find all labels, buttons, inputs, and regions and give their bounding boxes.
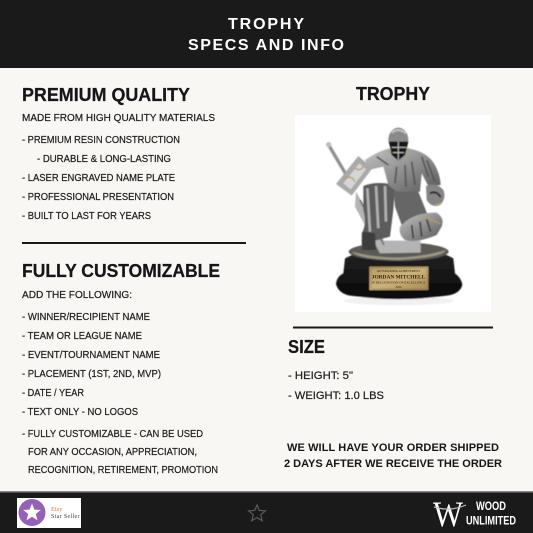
list: quality features: - PREMIUM RESIN CONSTRUCTION: [22, 135, 180, 146]
text: occasions note: - FULLY CUSTOMIZABLE - CAN BE USED: [22, 429, 203, 440]
logo: Wood Unlimited: WOOD: [476, 501, 506, 513]
plate text: OUTSTANDING ACHIEVEMENT: [377, 269, 420, 273]
list: customization options: - DATE / YEAR: [22, 388, 84, 399]
list: customization options: - EVENT/TOURNAMENT NAME: [22, 350, 160, 361]
heading: fully customizable: FULLY CUSTOMIZABLE: [22, 261, 220, 281]
image: goalie trophy: [295, 115, 491, 312]
helmet: [388, 128, 408, 161]
heading: size: SIZE: [288, 337, 325, 357]
trophy base: [336, 242, 462, 299]
name plate: [369, 267, 428, 290]
shipping notice: 2 DAYS AFTER WE RECEIVE THE ORDER: [284, 458, 502, 470]
list: dimensions: - WEIGHT: 1.0 LBS: [288, 390, 384, 402]
jersey: [365, 148, 441, 192]
header band: [0, 0, 533, 68]
plate text: 2026: [396, 285, 402, 289]
plate text: JORDAN MITCHELL: [372, 274, 426, 280]
leg pads: [362, 183, 443, 250]
shipping notice: WE WILL HAVE YOUR ORDER SHIPPED: [287, 442, 499, 454]
list: quality features: - PROFESSIONAL PRESENTATION: [22, 192, 174, 203]
logo: Wood Unlimited: UNLIMITED: [466, 514, 516, 528]
panel: premium quality: [22, 85, 215, 222]
badge: Etsy star seller: [17, 498, 81, 528]
text: occasions note: FOR ANY OCCASION, APPRECIATION,: [28, 447, 197, 458]
logo mark W: W: [433, 494, 463, 533]
goalie stick: [326, 142, 421, 253]
catching glove: [426, 185, 444, 206]
list: quality features: [22, 135, 180, 222]
list: customization options: - WINNER/RECIPIENT NAME: [22, 312, 150, 323]
list: quality features: - LASER ENGRAVED NAME PLATE: [22, 173, 175, 184]
base reflection: [344, 296, 454, 305]
icon: outlined star: [249, 505, 265, 521]
list: customization options: - TEAM OR LEAGUE NAME: [22, 331, 142, 342]
badge: Etsy star seller: Etsy: [51, 506, 63, 513]
plate text: IN RECOGNITION OF EXCELLENCE: [372, 280, 425, 284]
list: customization options: - TEXT ONLY - NO LOGOS: [22, 407, 138, 418]
shipping notice: [284, 442, 502, 470]
list: quality features: - DURABLE & LONG-LASTING: [37, 154, 171, 165]
text: add the following: ADD THE FOLLOWING:: [22, 290, 132, 301]
heading: trophy: TROPHY: [356, 84, 430, 104]
plate text: [372, 269, 426, 289]
header title: SPECS AND INFO: [188, 37, 344, 54]
heading: premium quality: PREMIUM QUALITY: [22, 85, 190, 105]
badge: Etsy star seller: Star Seller: [51, 514, 80, 520]
list: dimensions: - HEIGHT: 5": [288, 370, 353, 382]
text: occasions note: [22, 429, 218, 476]
list: customization options: [22, 312, 161, 418]
icon: purple star seal: [18, 499, 46, 526]
blocker pad: [336, 156, 372, 196]
text: occasions note: RECOGNITION, RETIREMENT, PROMOTION: [28, 465, 218, 476]
logo: Wood Unlimited: [433, 494, 516, 533]
list: customization options: - PLACEMENT (1ST, 2ND, MVP): [22, 369, 161, 380]
text: materials intro: MADE FROM HIGH QUALITY MATERIALS: [22, 113, 215, 124]
list: dimensions: [288, 370, 384, 402]
list: quality features: - BUILT TO LAST FOR YEARS: [22, 211, 151, 222]
header title: TROPHY: [228, 16, 304, 33]
header title: [188, 16, 344, 54]
panel: fully customizable: [22, 261, 220, 476]
panel: size: [288, 337, 384, 402]
footer band: [0, 491, 533, 533]
